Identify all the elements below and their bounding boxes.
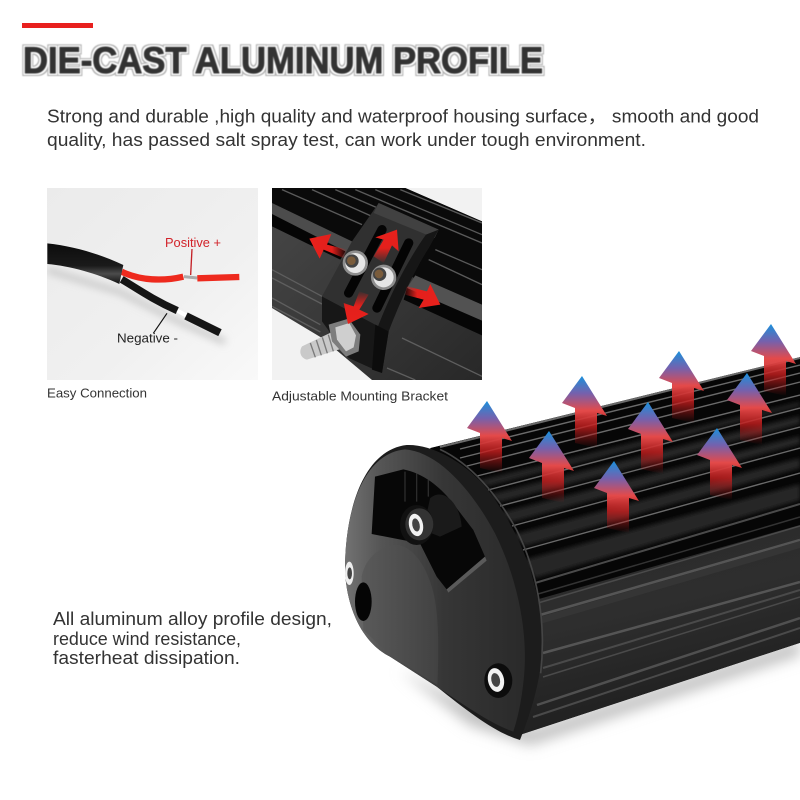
panel: easy connection photo: [47, 188, 258, 380]
arrow 3: [562, 376, 607, 448]
label: positive: Positive +: [165, 236, 221, 250]
lower ridges: [533, 504, 800, 717]
arrow 7: [697, 428, 742, 500]
side description text: All aluminum alloy profile design,: [53, 609, 332, 629]
heat arrows: [467, 324, 796, 533]
cable hole: [355, 582, 372, 621]
light bar product: [345, 357, 800, 745]
caption: easy connection: Easy Connection: [47, 386, 147, 400]
vent window: [372, 469, 487, 593]
mounting bolt: [300, 319, 360, 360]
arrow 1: [467, 401, 512, 473]
rim: [345, 445, 542, 740]
slots: [349, 230, 382, 293]
label: negative: Negative -: [117, 332, 178, 346]
red wire: [122, 272, 183, 280]
cap face: [345, 449, 525, 732]
bar housing: [272, 188, 482, 380]
cable shadow: [47, 270, 225, 342]
housing lip and channel: [272, 203, 355, 253]
intro text: quality, has passed salt spray test, can work under tough environment.: [47, 130, 646, 150]
intro text: Strong and durable ,high quality and waterproof housing surface， smooth and good: [47, 106, 759, 126]
top screw: [400, 505, 433, 545]
side description text: fasterheat dissipation.: [53, 648, 240, 668]
side screw: [345, 562, 354, 585]
fin shading: [477, 402, 800, 578]
panel: mounting bracket photo: [272, 188, 482, 380]
side description text: [53, 609, 332, 668]
arrow 4: [594, 461, 639, 533]
arrow 9: [751, 324, 796, 396]
bar fins: [272, 188, 482, 311]
title: DIE-CAST ALUMINUM PROFILE: [23, 40, 543, 81]
inner dome: [362, 545, 438, 685]
arrow 5: [628, 402, 673, 474]
intro text: [47, 106, 759, 150]
side description text: reduce wind resistance,: [53, 629, 241, 649]
ground shadow: [400, 640, 800, 745]
adjust arrows: [309, 230, 440, 324]
arrow 2: [529, 431, 574, 503]
sheath: [47, 243, 123, 284]
fin highlights: [440, 358, 800, 550]
arrow 8: [727, 373, 772, 445]
accent bar: [22, 23, 93, 28]
bar body: [430, 357, 800, 735]
hex nuts: [343, 250, 396, 290]
bottom screw: [484, 663, 512, 698]
caption: adjustable bracket: Adjustable Mounting Bracket: [272, 388, 448, 404]
black wire: [122, 279, 177, 311]
arrow 6: [659, 351, 704, 423]
pointer lines: [191, 249, 192, 275]
end cap: [345, 445, 542, 740]
bracket: [322, 203, 439, 373]
